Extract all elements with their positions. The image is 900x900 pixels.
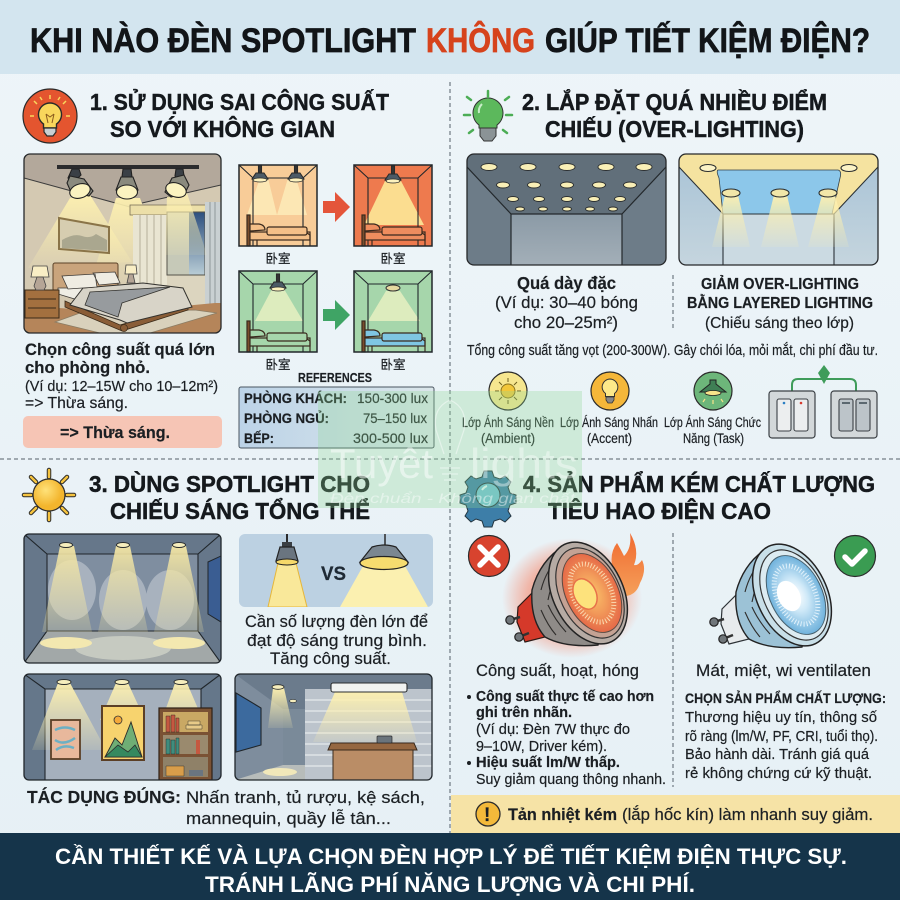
text: too dense: (Ví dụ: 30–40 bóng	[495, 293, 638, 312]
text: too dense: cho 20–25m²)	[514, 313, 618, 332]
references table: 300-500 lux	[353, 430, 428, 446]
heading 4: 4. SẢN PHẨM KÉM CHẤT LƯỢNG	[523, 469, 875, 497]
watermark	[318, 391, 582, 508]
watermark: Tuyêt	[330, 440, 433, 487]
heading 3: CHIẾU SÁNG TỔNG THỂ	[110, 497, 370, 524]
room labels: 卧室	[380, 354, 406, 373]
text: too high wattage	[25, 340, 218, 412]
room labels: 卧室	[380, 248, 406, 267]
text: choose quality products: Bảo hành dài. Tránh giá quá	[685, 746, 870, 763]
footer band: CẦN THIẾT KẾ VÀ LỰA CHỌN ĐÈN HỢP LÝ ĐỂ TIẾT KIỆM ĐIỆN THỰC SỰ.	[55, 844, 847, 869]
callout: poor heat dissipation: (lắp hốc kín) làm nhanh suy giảm.	[622, 805, 873, 824]
panel: 2 over-lighting	[462, 88, 878, 446]
footer band	[0, 833, 900, 900]
heading 2: 2. LẮP ĐẶT QUÁ NHIỀU ĐIỂM	[522, 88, 827, 115]
references table: PHÒNG NGỦ:	[244, 411, 329, 426]
heading 4: TIÊU HAO ĐIỆN CAO	[548, 497, 771, 524]
callout: poor heat dissipation	[451, 795, 900, 833]
heading 1: 1. SỬ DỤNG SAI CÔNG SUẤT	[90, 87, 390, 115]
heading 1: SO VỚI KHÔNG GIAN	[110, 115, 335, 142]
title	[30, 21, 870, 60]
references table: 75–150 lux	[363, 410, 427, 426]
bullet list: poor product issues: (Ví dụ: Đèn 7W thực đo	[476, 722, 630, 738]
references table: REFERENCES	[298, 371, 372, 385]
footer band: TRÁNH LÃNG PHÍ NĂNG LƯỢNG VÀ CHI PHÍ.	[205, 872, 695, 897]
bullet list: poor product issues: 9–10W, Driver kém).	[476, 739, 607, 755]
callout: poor heat dissipation: Tản nhiệt kém	[508, 806, 617, 824]
layer: task	[664, 372, 761, 446]
text: too high wattage: Chọn công suất quá lớn	[25, 340, 215, 359]
layer: ambient: (Ambient)	[481, 431, 535, 446]
bullet list: poor product issues: Hiệu suất lm/W thấp.	[476, 755, 620, 771]
mini room: green before	[239, 271, 317, 352]
mini room: too bright, two lamps	[239, 165, 317, 246]
callout: too bright	[23, 416, 222, 448]
icon: cool bulb	[710, 531, 847, 659]
mini room: overheated, single lamp	[354, 165, 432, 246]
mini room: green after	[354, 271, 432, 352]
text: too dense: Quá dày đặc	[517, 273, 616, 293]
layer: ambient: Lớp Ánh Sáng Nền	[462, 415, 554, 430]
layer: accent: Lớp Ánh Sáng Nhấn	[560, 415, 658, 430]
callout: poor heat dissipation: !	[484, 805, 490, 826]
room labels	[265, 248, 406, 373]
text: correct use: mannequin, quầy lễ tân...	[186, 809, 391, 828]
icon: hot bulb	[502, 529, 644, 658]
text: reduce over-lighting: (Chiếu sáng theo lớp)	[705, 315, 854, 332]
text: need many lamps: Cần số lượng đèn lớn để	[245, 613, 428, 631]
text: choose quality products: rẻ không chứng cứ kỹ thuật.	[685, 765, 872, 782]
heading 2	[522, 88, 827, 142]
text: correct use: Nhấn tranh, tủ rượu, kệ sách,	[186, 788, 425, 807]
panel: 3 spotlight as general lighting	[24, 470, 433, 828]
layer: ambient	[462, 372, 554, 446]
heading 3	[89, 470, 370, 524]
illustration: over-lit bedroom	[24, 154, 221, 333]
room labels: 卧室	[265, 248, 291, 267]
heading 2: CHIẾU (OVER-LIGHTING)	[545, 115, 804, 142]
room labels: 卧室	[265, 354, 291, 373]
text: too high wattage: (Ví dụ: 12–15W cho 10–12m²)	[25, 378, 218, 395]
text: too high wattage: => Thừa sáng.	[25, 395, 128, 412]
caption: hot bulb: Công suất, hoạt, hóng	[476, 662, 639, 680]
bullet list: poor product issues: ghi trên nhãn.	[476, 705, 572, 721]
text: reduce over-lighting: GIẢM OVER-LIGHTING	[701, 276, 859, 293]
text: choose quality products	[685, 689, 886, 782]
illustration: narrow vs wide beam	[239, 534, 433, 607]
illustration: reception desk	[235, 674, 432, 780]
text: need many lamps	[245, 613, 428, 668]
text: correct use: TÁC DỤNG ĐÚNG:	[27, 786, 181, 807]
layer: task: Năng (Task)	[683, 431, 744, 446]
panel: 1 wrong wattage	[23, 87, 434, 448]
bullet list: poor product issues: Công suất thực tế cao hơn	[476, 689, 654, 705]
illustration: narrow vs wide beam: VS	[321, 564, 346, 585]
arrow: red	[323, 192, 350, 222]
heading 3: 3. DÙNG SPOTLIGHT CHO	[89, 470, 370, 497]
text: reduce over-lighting	[687, 276, 873, 332]
bullet list: poor product issues	[467, 689, 666, 788]
references table: BẾP:	[244, 431, 274, 446]
layer: accent: (Accent)	[587, 431, 632, 446]
icon: smart switches	[769, 365, 877, 438]
watermark: lights	[470, 440, 578, 487]
text: reduce over-lighting: BẰNG LAYERED LIGHTING	[687, 294, 873, 312]
icon: check	[834, 536, 876, 576]
references table: PHÒNG KHÁCH:	[244, 391, 347, 406]
text: need many lamps: Tăng công suất.	[270, 650, 391, 668]
heading 4	[523, 469, 875, 524]
title: KHÔNG	[426, 21, 535, 60]
layer: task: Lớp Ánh Sáng Chức	[664, 415, 761, 430]
header band	[0, 0, 900, 74]
illustration: spots on dark room	[24, 534, 221, 663]
illustration: dense ceiling	[467, 154, 666, 265]
illustration: accent gallery	[24, 674, 221, 780]
text: too high wattage: cho phòng nhỏ.	[25, 358, 150, 377]
icon: sun	[24, 470, 74, 520]
callout: too bright: => Thừa sáng.	[60, 423, 170, 442]
illustration: layered lighting ceiling	[679, 154, 878, 265]
references table: 150-300 lux	[357, 390, 428, 406]
text: need many lamps: đạt độ sáng trung bình.	[247, 632, 427, 650]
text: correct use	[27, 786, 425, 828]
text: choose quality products: rõ ràng (lm/W, PF, CRI, tuổi thọ).	[685, 728, 878, 745]
arrow: green	[323, 300, 350, 330]
text: choose quality products: Thương hiệu uy tín, thông số	[685, 709, 878, 726]
icon: light bulb in red circle	[23, 89, 77, 143]
watermark: Đèn chuẩn - Không gian chất	[330, 490, 576, 506]
icon: cross	[468, 536, 510, 576]
text: too dense	[495, 273, 638, 332]
title: KHI NÀO ĐÈN SPOTLIGHT	[30, 22, 416, 60]
caption: cool bulb: Mát, miệt, wi ventilaten	[696, 662, 871, 680]
icon: green bulb	[464, 91, 512, 141]
panel: 4 poor quality products	[451, 469, 900, 833]
references table	[239, 371, 434, 448]
bullet list: poor product issues: Suy giảm quang thông nhanh.	[476, 772, 666, 788]
layer: accent	[560, 372, 658, 446]
heading 1	[90, 87, 390, 142]
icon: gear	[460, 471, 516, 527]
